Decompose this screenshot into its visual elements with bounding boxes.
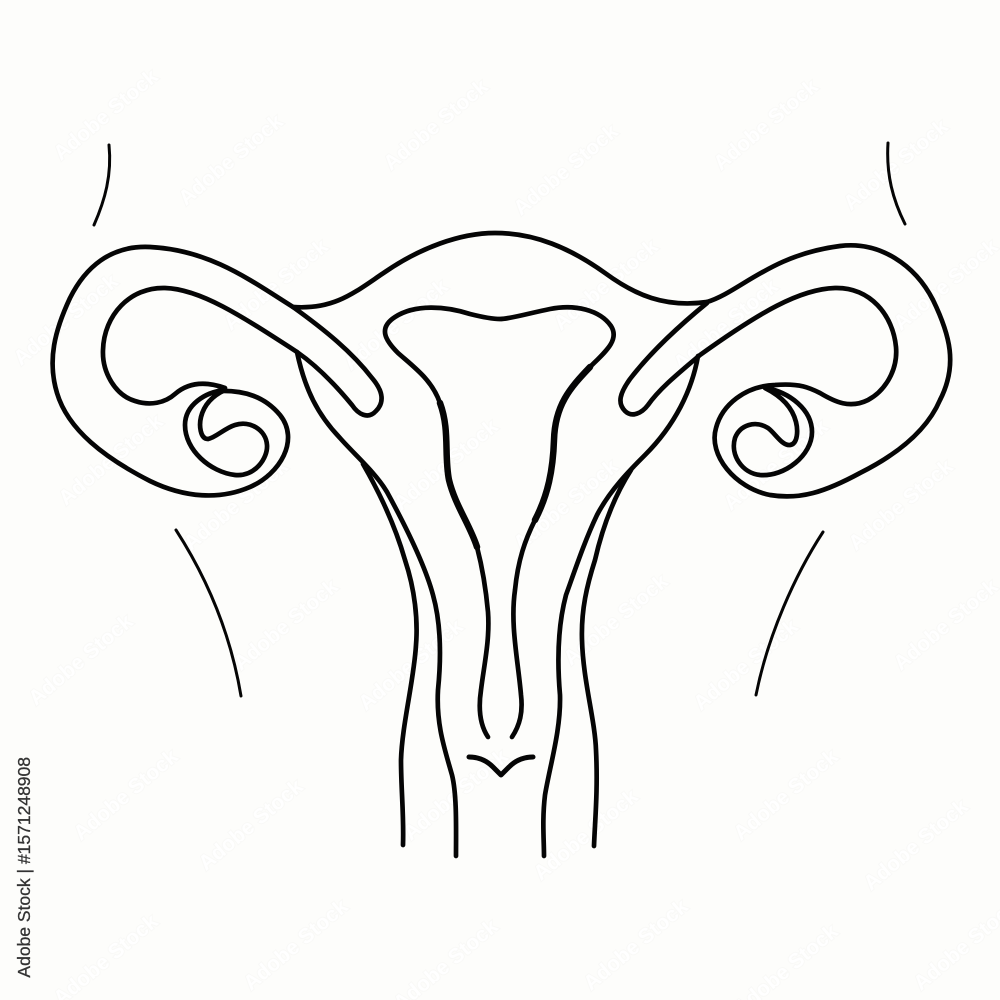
watermark pattern: Adobe Stock bbox=[229, 575, 343, 675]
watermark pattern: Adobe Stock bbox=[339, 275, 453, 375]
watermark pattern: Adobe Stock bbox=[709, 75, 823, 175]
watermark pattern: Adobe Stock bbox=[174, 110, 288, 210]
thick left side of cavity bbox=[440, 403, 477, 547]
watermark pattern: Adobe Stock bbox=[24, 610, 138, 710]
uterus fundus bbox=[293, 233, 707, 307]
watermark pattern: Adobe Stock bbox=[889, 235, 1000, 335]
left fallopian tube inner contour bbox=[103, 288, 382, 415]
watermark pattern: Adobe Stock bbox=[389, 415, 503, 515]
watermark pattern: Adobe Stock bbox=[729, 745, 843, 845]
left inner vaginal line bbox=[363, 464, 417, 845]
watermark pattern: Adobe Stock bbox=[529, 785, 643, 885]
left ovary spiral bbox=[185, 390, 267, 475]
lower left leg curve bbox=[176, 530, 241, 696]
watermark pattern: Adobe Stock bbox=[399, 745, 513, 845]
watermark pattern: Adobe Stock bbox=[859, 795, 973, 895]
watermark pattern: Adobe Stock bbox=[549, 235, 663, 335]
watermark pattern: Adobe Stock bbox=[509, 455, 623, 555]
right inner vaginal line bbox=[582, 470, 631, 846]
watermark pattern: Adobe Stock bbox=[559, 570, 673, 670]
watermark pattern: Adobe Stock bbox=[354, 615, 468, 715]
watermark pattern: Adobe Stock bbox=[54, 410, 168, 510]
body contour lines bbox=[94, 143, 905, 696]
watermark pattern: Adobe Stock bbox=[579, 895, 693, 995]
watermark pattern: Adobe Stock bbox=[889, 575, 1000, 675]
watermark pattern: Adobe Stock bbox=[719, 415, 833, 515]
watermark pattern: Adobe Stock bbox=[689, 615, 803, 715]
watermark pattern: Adobe Stock bbox=[669, 275, 783, 375]
watermark pattern: Adobe Stock bbox=[194, 775, 308, 875]
watermark pattern: Adobe Stock bbox=[844, 455, 958, 555]
watermark pattern: Adobe Stock bbox=[239, 895, 353, 995]
watermark pattern: Adobe Stock bbox=[69, 745, 183, 845]
upper left hip curve bbox=[94, 145, 110, 225]
watermark pattern: Adobe Stock bbox=[219, 235, 333, 335]
cervix chevron bbox=[469, 757, 533, 775]
stock image credit: Adobe Stock | #1571248908 bbox=[14, 757, 34, 978]
right uterine wall and vaginal line bbox=[543, 356, 698, 856]
right ovary spiral bbox=[734, 388, 812, 475]
left fallopian tube and ovary outer contour bbox=[53, 247, 293, 495]
upper right hip curve bbox=[888, 143, 905, 224]
right fallopian tube and ovary outer contour with inner edge bbox=[620, 245, 950, 496]
watermark pattern: Adobe Stock bbox=[179, 455, 293, 555]
watermark pattern: Adobe Stock bbox=[9, 270, 123, 370]
watermark pattern: Adobe Stock bbox=[839, 115, 953, 215]
lower right leg curve bbox=[756, 532, 823, 695]
uterine cavity and cervical canal bbox=[385, 307, 614, 737]
left uterine wall and outer vaginal line bbox=[297, 352, 456, 856]
thick right side of cavity bbox=[535, 367, 590, 520]
uterus diagram bbox=[53, 233, 950, 856]
watermark pattern: Adobe Stock bbox=[379, 75, 493, 175]
watermark pattern: Adobe Stock bbox=[49, 65, 163, 165]
watermark pattern: Adobe Stock bbox=[509, 120, 623, 220]
